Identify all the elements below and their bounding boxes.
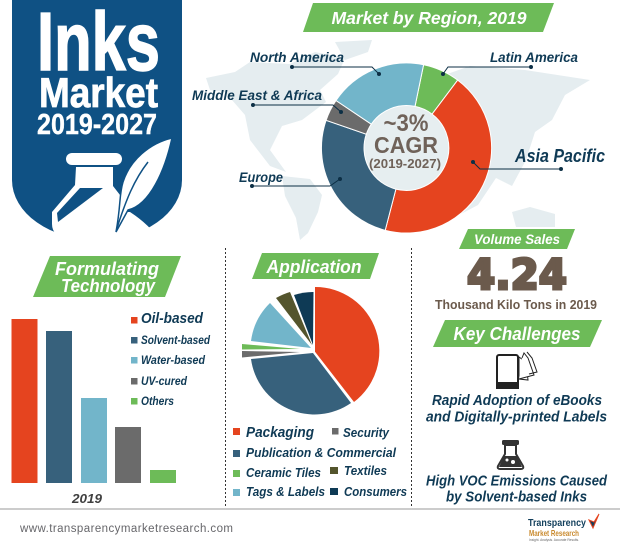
application legend: Publication & Commercial xyxy=(246,446,396,460)
application legend: Tags & Labels xyxy=(246,485,325,499)
bar chart legend: Oil-based xyxy=(141,310,204,327)
challenge text: eBooks xyxy=(426,392,607,426)
bar chart legend: Others xyxy=(141,396,174,408)
footer rule xyxy=(0,508,620,510)
banner: Market by Region: Market by Region, 2019 xyxy=(332,8,527,28)
segment: Middle East and Africa xyxy=(326,100,371,134)
challenge text: eBooks: Rapid Adoption of eBooks xyxy=(432,392,602,409)
slice: Textiles xyxy=(276,292,312,345)
application legend: Security xyxy=(343,426,390,440)
CAGR callout: ~3% xyxy=(384,110,428,137)
slice: Ceramic Tiles xyxy=(242,344,300,350)
challenge text: eBooks: and Digitally-printed Labels xyxy=(426,408,607,426)
title: years: 2019-2027 xyxy=(37,109,157,141)
segment: Latin America xyxy=(415,65,458,114)
bar chart legend: Solvent-based xyxy=(141,335,211,347)
pie chart: application xyxy=(242,287,379,414)
logo: Transparency Market Research: Transparency xyxy=(528,517,586,529)
banner: Key Challenges xyxy=(433,320,602,347)
footer url: www.transparencymarketresearch.com xyxy=(19,523,233,535)
icon: tablet and book xyxy=(496,352,537,389)
world map background xyxy=(206,40,590,240)
icon: ink bottle and feather xyxy=(52,138,172,241)
logo: Transparency Market Research: Market Research xyxy=(529,528,579,538)
banner: Formulating Technology xyxy=(33,256,181,297)
slice: Packaging xyxy=(315,287,379,402)
challenge text: VOC: by Solvent-based Inks xyxy=(446,488,587,506)
slice: Tags and Labels xyxy=(251,303,311,348)
donut center disc xyxy=(364,105,450,191)
banner: Market by Region xyxy=(303,3,554,32)
bar chart legend xyxy=(131,310,211,408)
region labels: Europe xyxy=(239,169,283,185)
application legend: Consumers xyxy=(344,485,407,499)
application legend: Packaging xyxy=(246,425,314,441)
stat caption: Thousand Kilo Tons in 2019 xyxy=(435,297,597,312)
bar chart: formulating technology xyxy=(12,319,176,483)
region labels: Asia Pacific xyxy=(514,146,605,166)
dotted column dividers xyxy=(226,248,412,508)
bar chart legend: UV-cured xyxy=(141,376,188,388)
slice: Publication and Commercial xyxy=(251,353,351,414)
banner: Volume Sales xyxy=(459,229,575,249)
bar chart legend: Water-based xyxy=(141,355,206,367)
region labels xyxy=(192,49,605,185)
leader lines xyxy=(250,65,563,188)
icon: flask xyxy=(498,440,523,469)
banner: Application xyxy=(252,253,379,279)
logo: Transparency Market Research: Insight. Analysis. Accurate Results. xyxy=(529,538,579,542)
banner: Application: Application xyxy=(266,257,362,277)
region labels: Latin America xyxy=(490,49,578,65)
application legend: Textiles xyxy=(344,464,387,478)
slice: Security xyxy=(242,351,300,358)
segment: North America xyxy=(336,63,424,124)
region labels: Middle East & Africa xyxy=(192,87,322,103)
donut chart: market by region xyxy=(321,63,492,233)
banner: Volume Sales: Volume Sales xyxy=(474,231,560,247)
CAGR callout: CAGR xyxy=(374,132,438,158)
banner: Key Challenges: Key Challenges xyxy=(454,324,580,344)
CAGR callout: (2019-2027) xyxy=(369,156,441,171)
logo: Transparency Market Research xyxy=(528,514,599,542)
bar chart year label: 2019 xyxy=(71,491,103,506)
stat: 4.24: 4.24 xyxy=(467,250,567,299)
segment: Europe xyxy=(321,120,396,230)
application legend: Ceramic Tiles xyxy=(246,466,321,480)
title: Market: Market xyxy=(39,69,158,116)
title shield xyxy=(12,0,182,240)
application legend xyxy=(233,425,407,499)
slice: Consumers xyxy=(294,292,314,345)
CAGR callout xyxy=(369,110,441,171)
banner: Formulating Technology: Technology xyxy=(61,276,156,296)
challenge text: VOC xyxy=(426,472,608,506)
segment: Asia Pacific xyxy=(385,80,492,233)
banner: Formulating Technology: Formulating xyxy=(55,259,159,279)
region labels: North America xyxy=(250,49,344,65)
